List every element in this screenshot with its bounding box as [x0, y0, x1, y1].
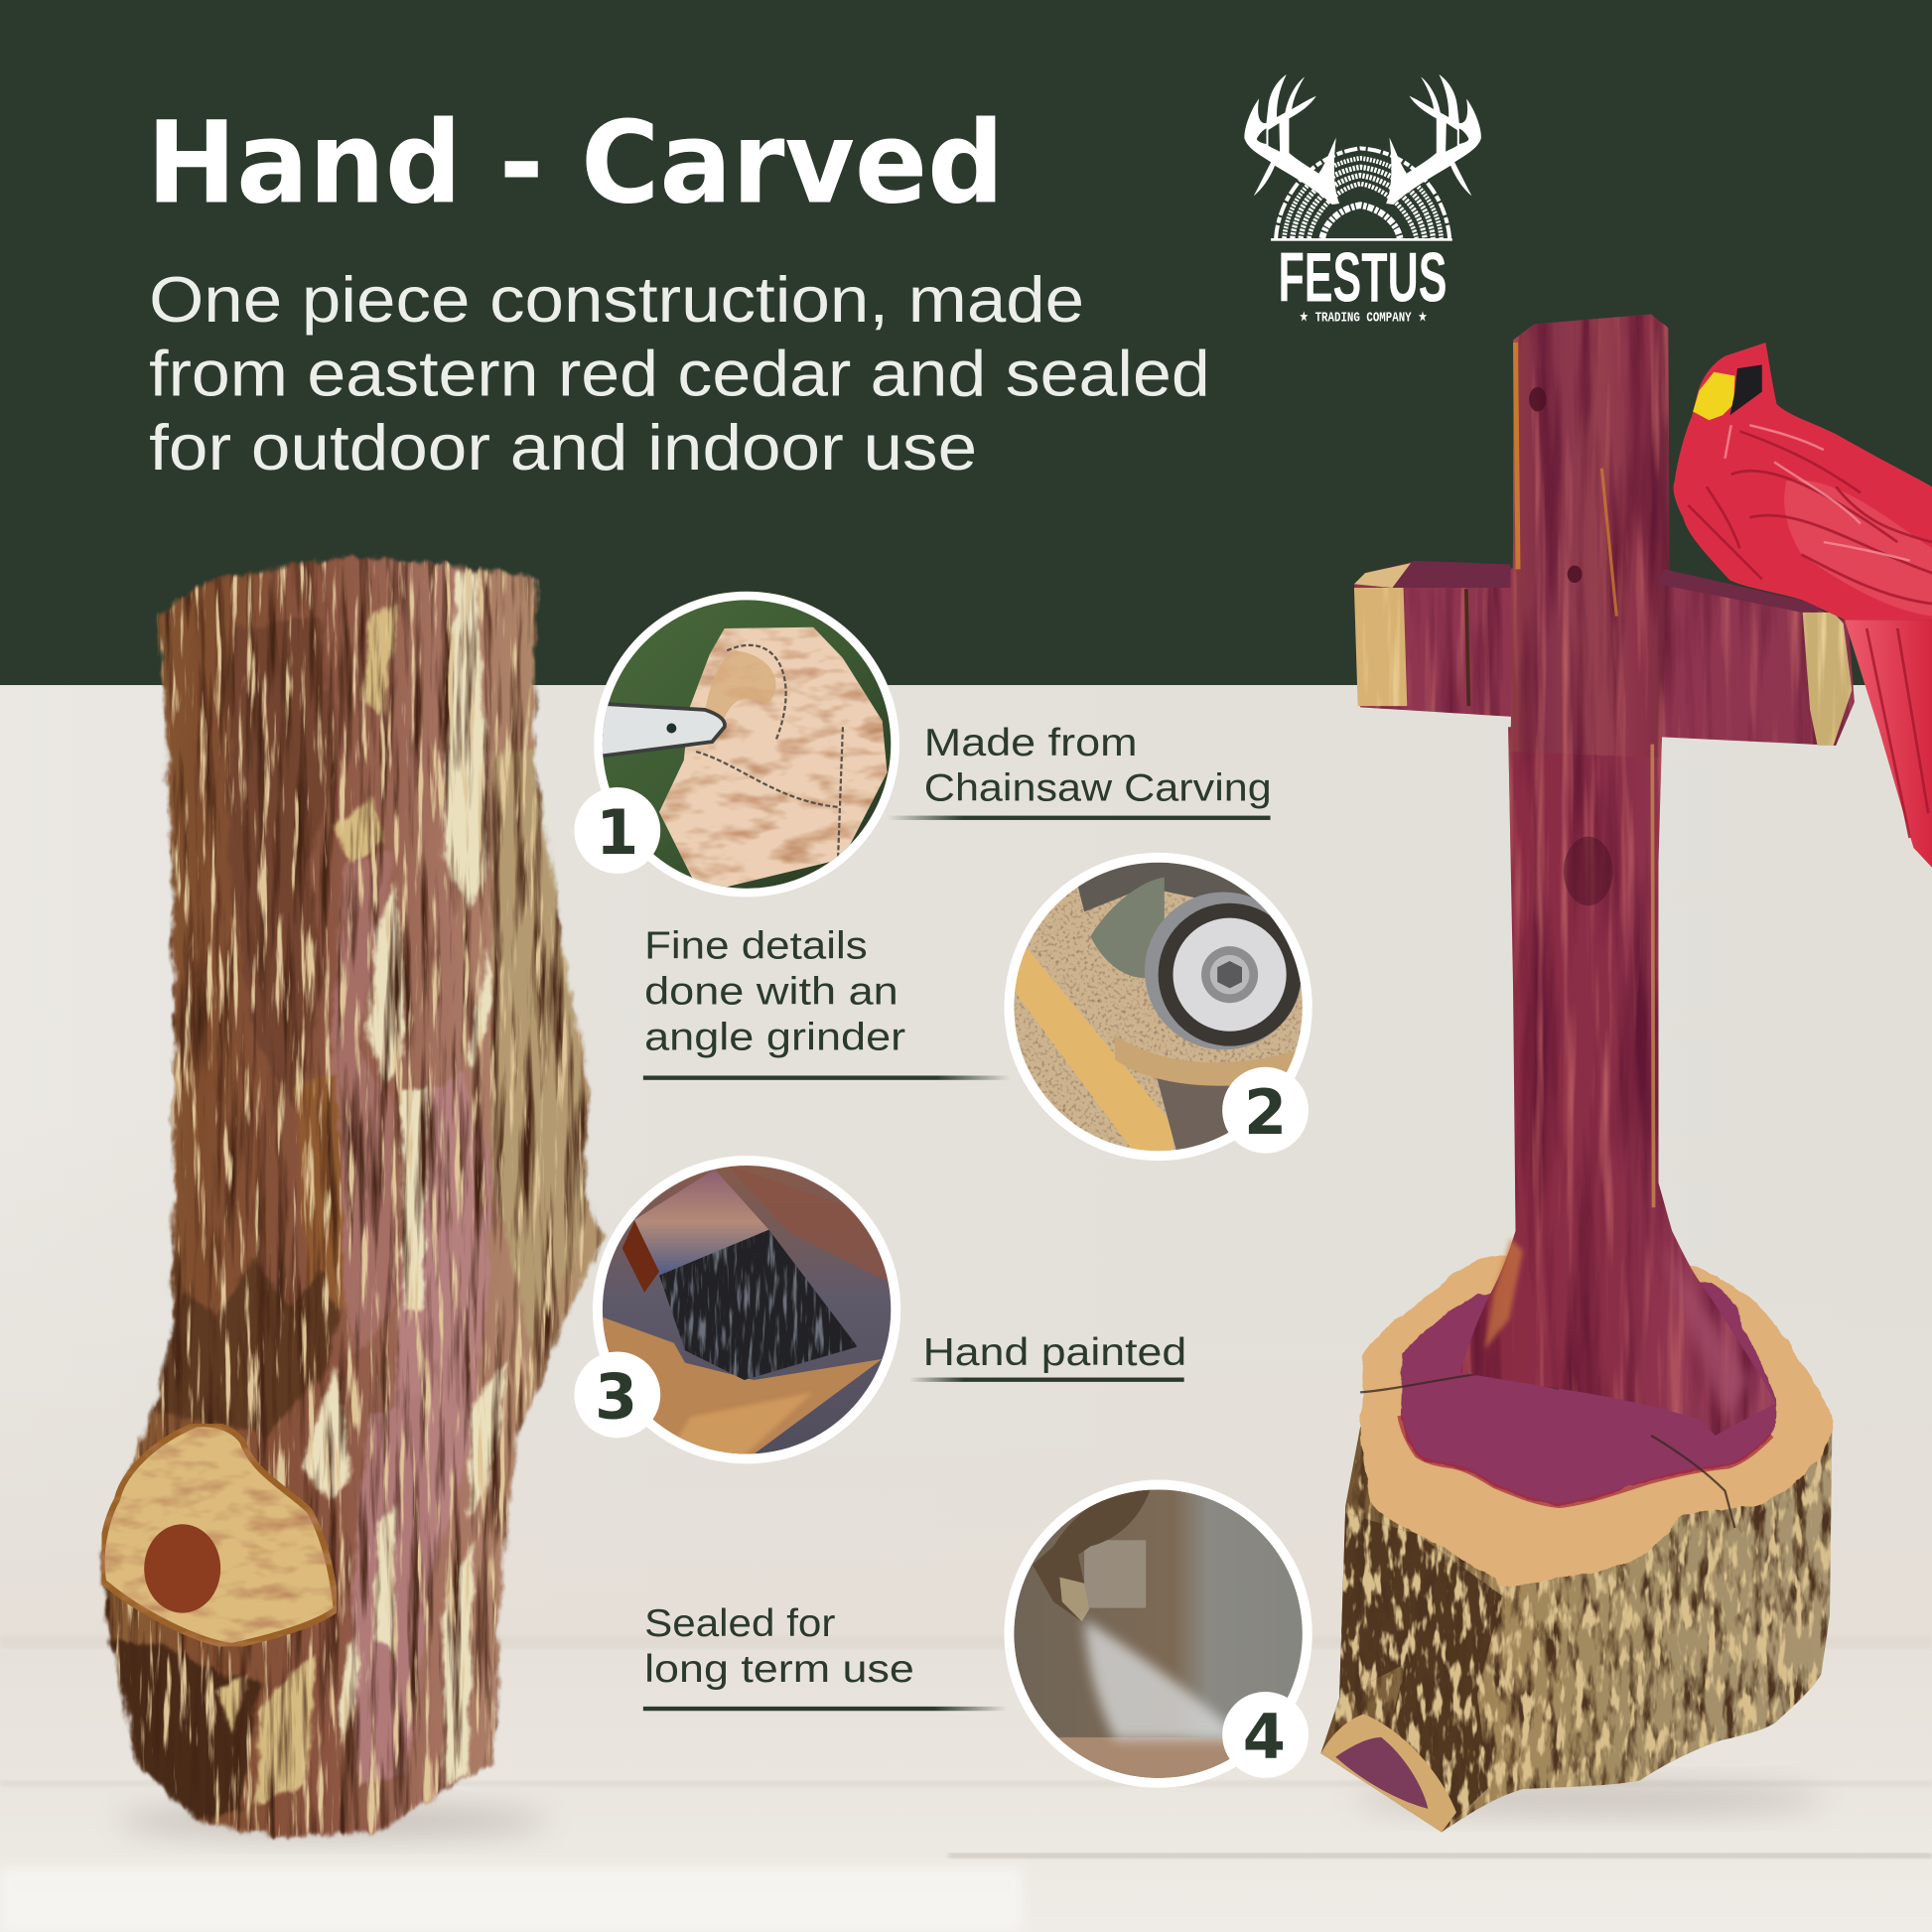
- title: Hand - Carved: [147, 97, 1004, 229]
- step 1 leader line: [888, 816, 1271, 820]
- log shadow: [117, 1806, 548, 1836]
- log body with bark patches: [100, 556, 605, 1837]
- stump crack: [1360, 1374, 1734, 1528]
- badge 2: 2: [1244, 1076, 1287, 1149]
- cross lower stem and flare: [1460, 727, 1775, 1436]
- raw cedar log: [100, 556, 605, 1837]
- step 1 label: Chainsaw Carving: [924, 767, 1272, 810]
- left arm cream end: [1354, 588, 1407, 706]
- stump dark bark: [1339, 1513, 1502, 1832]
- right arm top face: [1657, 569, 1834, 613]
- cardinal beak: [1693, 372, 1734, 420]
- stump cut top: [1360, 1254, 1832, 1586]
- cross knots: [1529, 387, 1613, 905]
- step 4 label: [644, 1602, 914, 1691]
- header band: [0, 0, 1932, 685]
- cross crack and edge details: [1466, 343, 1654, 1207]
- flare left orange highlight: [1484, 1238, 1523, 1349]
- logo: Festus Trading Company: [1244, 74, 1481, 327]
- icon: right antler: [1386, 74, 1481, 205]
- badge 3: 3: [595, 1360, 637, 1433]
- cross centre overlay: [1511, 542, 1670, 758]
- left arm top face: [1365, 561, 1511, 588]
- cross upper stem: [1511, 314, 1670, 752]
- step 4 label: long term use: [644, 1648, 914, 1691]
- badge 1: [574, 787, 660, 874]
- cross arms: [1354, 568, 1855, 746]
- subtitle: One piece construction, made: [149, 264, 1084, 336]
- background: wall and floor: [0, 685, 1932, 1932]
- step 2 label: [644, 925, 905, 1058]
- logo wordmark: FESTUS: [1278, 238, 1447, 317]
- step 2 label: angle grinder: [644, 1016, 905, 1058]
- cardinal tail: [1845, 620, 1932, 868]
- step 3: hand painted: [592, 1156, 900, 1466]
- stump purple heartwood: [1400, 1283, 1776, 1506]
- cardinal body: [1674, 343, 1932, 620]
- step 4 label: Sealed for: [644, 1602, 836, 1645]
- cardinal mask: [1729, 364, 1762, 415]
- flare right light area: [1663, 1244, 1749, 1417]
- cross shadow on floor: [1355, 1784, 1824, 1814]
- step 2 label: Fine details: [644, 925, 868, 968]
- step 4: sealed: [1004, 1478, 1312, 1788]
- step 3 leader line: [909, 1378, 1184, 1382]
- cardinal feather marks: [1688, 431, 1932, 838]
- badge 1: 1: [596, 796, 638, 869]
- stump small purple knot: [1320, 1714, 1456, 1832]
- cardinal wing: [1784, 480, 1932, 617]
- step 2 leader line: [643, 1075, 1011, 1080]
- logo tagline: ★ TRADING COMPANY ★: [1299, 311, 1428, 327]
- step 4 leader line: [643, 1707, 1007, 1711]
- carved cedar cross on stump: [1320, 314, 1855, 1832]
- subtitle: [149, 264, 1210, 483]
- badge 4: 4: [1243, 1701, 1286, 1773]
- log branch knot: [102, 1424, 337, 1646]
- photo: grinder wheel: [1014, 862, 1303, 1152]
- step 3 label: Hand painted: [923, 1331, 1186, 1374]
- right arm cream end: [1803, 613, 1852, 746]
- step 1: chainsaw carving: [592, 592, 899, 899]
- badge 4: [1222, 1692, 1309, 1778]
- step 1 label: Made from: [924, 722, 1138, 764]
- photo: paint brush: [602, 1166, 892, 1453]
- icon: left antler: [1244, 74, 1339, 205]
- photo: chainsaw and wood block: [602, 600, 892, 889]
- subtitle: for outdoor and indoor use: [149, 412, 977, 483]
- step 2: angle grinder: [1004, 853, 1312, 1165]
- stump heartwood red rim: [1400, 1416, 1772, 1506]
- icon: tree ring half disc: [1271, 148, 1452, 241]
- step 1 label: [924, 722, 1272, 810]
- badge 2: [1222, 1067, 1309, 1154]
- photo: sprayer nozzle: [1014, 1489, 1303, 1778]
- carved cardinal: [1674, 343, 1932, 868]
- step 2 label: done with an: [644, 970, 898, 1013]
- badge 3: [574, 1351, 660, 1438]
- subtitle: from eastern red cedar and sealed: [149, 338, 1210, 409]
- stump bark: [1320, 1380, 1832, 1832]
